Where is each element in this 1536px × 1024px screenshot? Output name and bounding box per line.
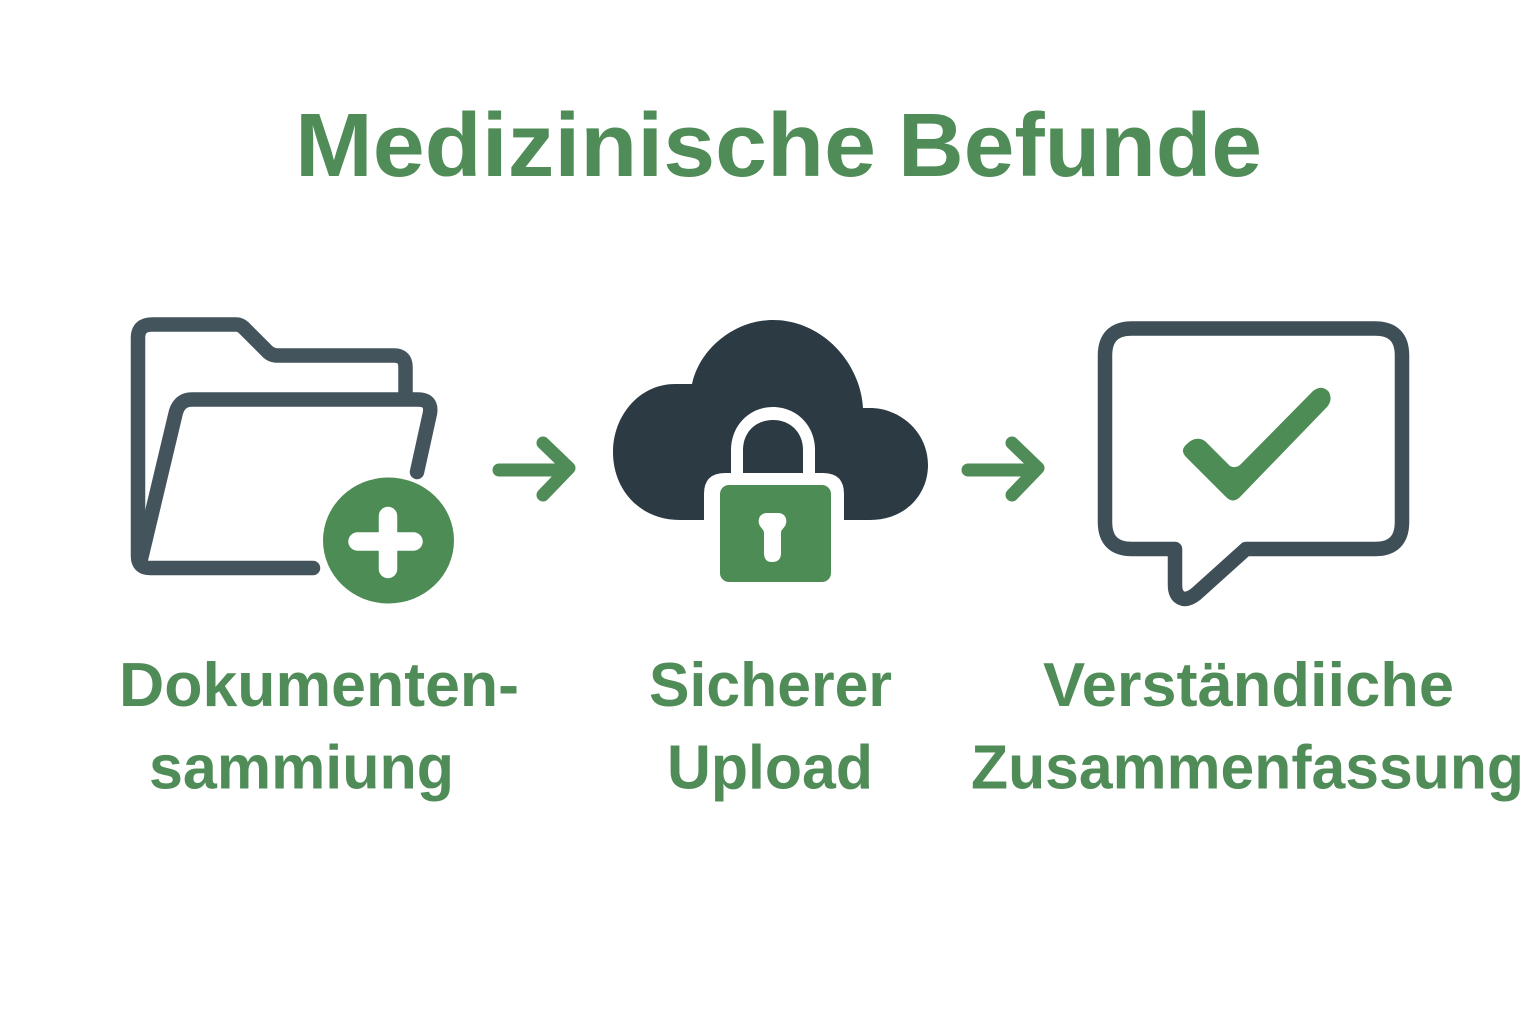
label: step one: sammiung: [149, 734, 454, 802]
title: Medizinische: [295, 96, 876, 196]
label: step three: Verständiiche: [1043, 651, 1454, 720]
label: step two: Sicherer: [649, 651, 892, 720]
icon: folder with plus: [138, 324, 454, 604]
arrow: step one to two: [499, 443, 569, 495]
icon: speech bubble with check: [1105, 328, 1402, 599]
label: step three: Zusammenfassung: [971, 734, 1524, 802]
icon: cloud with padlock: [613, 320, 928, 582]
arrow: step two to three: [968, 443, 1038, 495]
label: step one: Dokumenten-: [119, 651, 519, 720]
title: Befunde: [898, 96, 1262, 196]
label: step two: Upload: [667, 734, 873, 802]
